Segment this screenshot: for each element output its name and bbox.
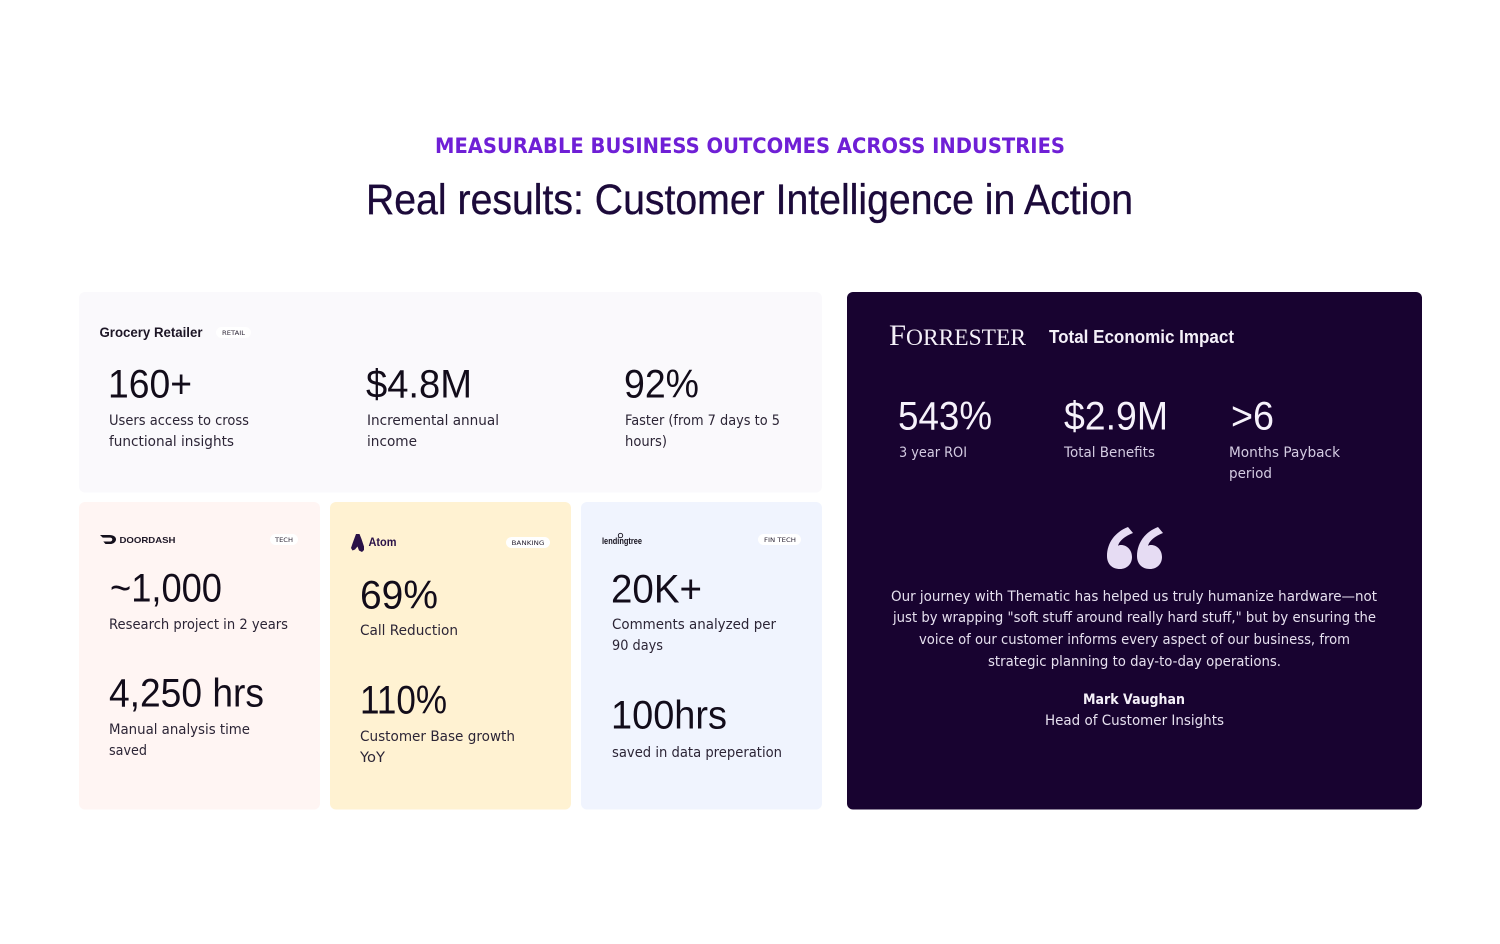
stat: $4.8M: Incremental annual: [367, 413, 499, 429]
eyebrow heading: MEASURABLE BUSINESS OUTCOMES ACROSS INDUSTRIES: [435, 134, 1065, 158]
stat: 4,250 hrs: saved: [109, 743, 147, 759]
logo: lendingtree: [602, 533, 642, 546]
attribution: Head of Customer Insights: [1045, 713, 1224, 729]
stat: 160+: Users access to cross: [109, 413, 249, 429]
stat: 92%: [624, 362, 780, 450]
stat: 160+: 160+: [108, 362, 192, 406]
stat: 543%: 3 year ROI: [899, 445, 967, 461]
title: Real results: Customer Intelligence in Action: [366, 176, 1133, 224]
icon: quotation mark: [1107, 527, 1163, 569]
tag: banking: BANKING: [512, 540, 545, 547]
quote text: Our journey with Thematic has helped us truly humanize hardware—not: [891, 589, 1377, 605]
company name: grocery retailer: Grocery Retailer: [100, 325, 203, 340]
stat: ~1,000: ~1,000: [110, 566, 222, 610]
quote text: strategic planning to day-to-day operations.: [988, 654, 1281, 670]
stat: 4,250 hrs: Manual analysis time: [109, 722, 250, 738]
tag: fin tech: [758, 534, 801, 545]
stat: 69%: Call Reduction: [360, 623, 458, 639]
stat: 110%: YoY: [359, 750, 385, 766]
stat: >6: >6: [1231, 394, 1274, 438]
panel heading: Total Economic Impact: [1049, 327, 1234, 347]
stat: $4.8M: income: [367, 434, 417, 450]
tag: retail: RETAIL: [222, 330, 246, 337]
logo: atom: [351, 534, 396, 552]
stat: 110%: Customer Base growth: [360, 729, 515, 745]
stat: 92%: Faster (from 7 days to 5: [625, 413, 780, 429]
logo: atom: Atom: [368, 537, 396, 549]
panel: lendingtree: [581, 502, 822, 810]
stat: 92%: 92%: [624, 362, 699, 406]
logo: forrester: FORRESTER: [889, 319, 1027, 352]
stat: ~1,000: Research project in 2 years: [109, 617, 288, 633]
stat: 20K+: 90 days: [612, 638, 663, 654]
stat: 20K+: [611, 567, 776, 654]
stat: 160+: [108, 362, 249, 450]
stat: 543%: [898, 394, 992, 461]
tag: tech: TECH: [274, 537, 293, 544]
stat: $2.9M: [1063, 394, 1168, 461]
stat: 69%: 69%: [360, 573, 438, 617]
tag: banking: [506, 537, 550, 548]
stat: >6: [1229, 394, 1341, 482]
stat: $4.8M: [366, 362, 499, 450]
logo: doordash: [100, 535, 176, 545]
stat: 20K+: 20K+: [611, 567, 702, 611]
panel: atom: [330, 502, 571, 810]
stat: 160+: functional insights: [109, 434, 234, 450]
stat: ~1,000: [109, 566, 288, 633]
stat: 92%: hours): [625, 434, 667, 450]
logo: lendingtree: lendingtree: [602, 536, 642, 546]
attribution: [1045, 692, 1224, 729]
stat: 69%: [360, 573, 458, 639]
panel: forrester: [847, 292, 1422, 810]
attribution: Mark Vaughan: [1083, 692, 1185, 708]
logo: doordash: DOORDASH: [120, 535, 176, 545]
tag: tech: [270, 534, 298, 545]
stat: 543%: 543%: [898, 394, 992, 438]
stat: >6: period: [1229, 466, 1272, 482]
stat: 100hrs: 100hrs: [611, 693, 727, 737]
stat: 110%: [359, 678, 515, 766]
quote text: voice of our customer informs every aspect of our business, from: [919, 632, 1350, 648]
stat: 100hrs: [611, 693, 782, 761]
stat: $2.9M: $2.9M: [1064, 394, 1168, 438]
stat: $4.8M: $4.8M: [366, 362, 472, 406]
stat: 110%: 110%: [360, 678, 447, 722]
stat: $2.9M: Total Benefits: [1063, 445, 1155, 461]
stat: 100hrs: saved in data preperation: [612, 745, 782, 761]
quote text: just by wrapping "soft stuff around really hard stuff," but by ensuring the: [892, 610, 1376, 626]
tag: retail: [216, 327, 251, 338]
stat: 4,250 hrs: 4,250 hrs: [109, 671, 264, 715]
stat: 4,250 hrs: [109, 671, 264, 759]
stat: 20K+: Comments analyzed per: [612, 617, 776, 633]
quote text: [891, 589, 1377, 670]
tag: fin tech: FIN TECH: [764, 537, 796, 544]
panel: grocery retailer: [79, 292, 822, 492]
panel: doordash: [79, 502, 320, 810]
stat: >6: Months Payback: [1229, 445, 1341, 461]
